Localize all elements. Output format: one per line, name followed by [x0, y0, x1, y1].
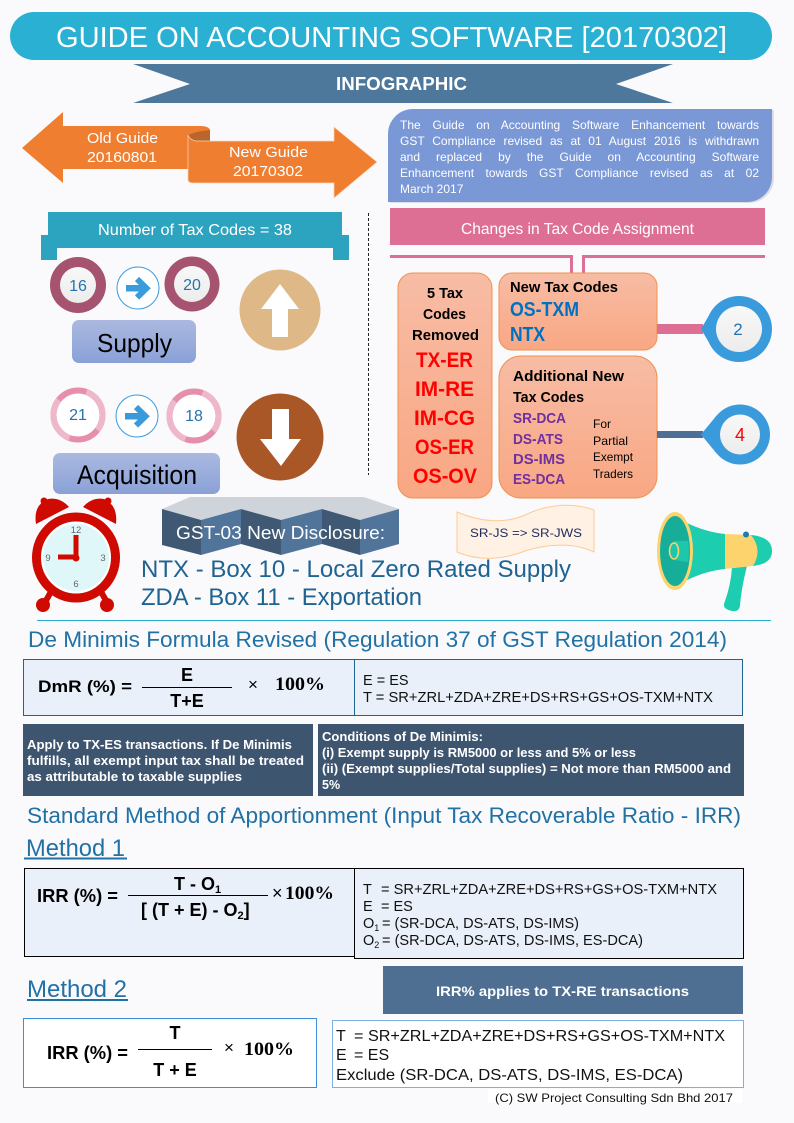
panel: additional new tax codes: Partial: [593, 434, 628, 448]
panel: removed codes: Codes: [423, 306, 466, 323]
method 2 formula: ×: [224, 1038, 234, 1057]
method 1 formula: ×: [272, 883, 283, 903]
heading: method 2: Method 2: [27, 976, 127, 1003]
icon: alarm clock: 3: [100, 553, 106, 564]
changes heading: [390, 208, 765, 245]
GST-03 disclosure heading: [162, 497, 399, 555]
method 2 formula: [24, 1018, 316, 1088]
GST-03 disclosure heading: GST-03 New Disclosure:: [176, 523, 385, 543]
method 1 definitions: = ES: [381, 899, 413, 915]
infographic ribbon: [133, 64, 673, 103]
panel: removed codes: TX-ER: [416, 349, 473, 372]
note: IRR applies to TX-RE: [383, 966, 743, 1014]
de minimis formula: [24, 660, 354, 716]
icon: acquisition arrow: [116, 395, 158, 437]
supply ring: 16: 16: [69, 278, 87, 295]
method 1 definitions: 1: [374, 923, 379, 933]
method 1 formula: T - O: [174, 874, 215, 894]
supply ring: 20: [164, 256, 220, 312]
note: IRR applies to TX-RE: IRR% applies to TX-RE transactions: [436, 983, 689, 999]
method 2 definitions: = SR+ZRL+ZDA+ZRE+DS+RS+GS+OS-TXM+NTX: [354, 1028, 725, 1045]
panel: new tax codes: NTX: [510, 324, 546, 346]
number of tax codes banner: Number of Tax Codes = 38: [98, 222, 292, 239]
panel: additional new tax codes: DS-ATS: [513, 431, 563, 448]
method 2 definitions: Exclude (SR-DCA, DS-ATS, DS-IMS, ES-DCA): [336, 1067, 683, 1084]
acquisition label: Acquisition: [77, 460, 197, 490]
panel: removed codes: 5 Tax: [427, 285, 464, 302]
intro text panel: GST Compliance revised as at 01 August 2016 is withdrawn: [400, 134, 759, 148]
arrow: new guide: [188, 127, 377, 198]
method 1 formula: [24, 868, 354, 956]
icon: supply arrow: [117, 267, 159, 309]
panel: additional new tax codes: DS-IMS: [513, 451, 565, 468]
note: TX-ES transactions: as attributable to taxable supplies: [27, 770, 242, 784]
heading: standard method: Standard Method of Apportionment (Input Tax Recoverable Ratio - IRR): [27, 803, 741, 828]
note: conditions of de minimis: (ii) (Exempt supplies/Total supplies) = Not more than RM5000 and: [322, 762, 731, 776]
intro text panel: March 2017: [400, 182, 464, 196]
panel: additional new tax codes: SR-DCA: [513, 410, 566, 427]
method 1 definitions: E: [363, 899, 373, 915]
intro text panel: and replaced by the Guide on Accounting Software: [400, 150, 759, 164]
icon: alarm clock: 6: [73, 579, 79, 590]
wave note: SR-JS to SR-JWS: [457, 505, 594, 558]
icon: down arrow: [236, 394, 324, 480]
note: TX-ES transactions: [23, 724, 313, 796]
arrow: new guide: New Guide: [229, 144, 308, 161]
acquisition ring: 21: 21: [69, 407, 87, 424]
note: conditions of de minimis: [318, 724, 744, 796]
callout: count 2: [657, 296, 772, 362]
method 1 definitions: = SR+ZRL+ZDA+ZRE+DS+RS+GS+OS-TXM+NTX: [381, 882, 717, 898]
panel: additional new tax codes: Tax Codes: [513, 389, 584, 406]
callout: count 4: 4: [735, 425, 745, 445]
method 1 formula: ]: [244, 900, 250, 920]
de minimis formula: E: [181, 665, 193, 685]
heading connector: [390, 256, 765, 273]
de minimis formula: 100%: [275, 674, 325, 695]
icon: alarm clock: 12: [71, 525, 81, 536]
note: TX-ES transactions: Apply to TX-ES transactions. If De Minimis: [27, 738, 292, 752]
method 2 definitions: = ES: [354, 1047, 389, 1064]
title banner: [10, 12, 772, 60]
note: conditions of de minimis: (i) Exempt supply is RM5000 or less and 5% or less: [322, 746, 636, 760]
panel: removed codes: IM-RE: [415, 378, 474, 401]
de minimis formula: T+E: [170, 691, 204, 711]
disclosure text: NTX - Box 10 - Local Zero Rated Supply: [141, 556, 571, 583]
method 1 formula: 2: [238, 910, 244, 922]
intro text panel: Enhancement towards GST Compliance revised as at 02: [400, 166, 759, 180]
de minimis formula: DmR (%) =: [38, 677, 132, 696]
method 1 formula: [ (T + E) - O: [141, 900, 238, 920]
de minimis definitions: T = SR+ZRL+ZDA+ZRE+DS+RS+GS+OS-TXM+NTX: [363, 690, 713, 706]
acquisition ring: 21: [47, 384, 109, 446]
method 2 formula: 100%: [244, 1039, 294, 1060]
arrow: old guide: Old Guide: [87, 130, 158, 147]
number of tax codes banner: [41, 212, 349, 260]
method 2 definitions: T: [336, 1028, 346, 1045]
method 1 definitions: O: [363, 916, 374, 932]
note: conditions of de minimis: 5%: [322, 778, 340, 792]
panel: additional new tax codes: [499, 356, 657, 498]
arrow: new guide: 20170302: [233, 163, 303, 180]
panel: additional new tax codes: For: [593, 417, 611, 431]
arrow: old guide: 20160801: [87, 149, 157, 166]
panel: removed codes: IM-CG: [414, 407, 475, 430]
icon: up arrow: [240, 270, 320, 350]
disclosure text: [141, 556, 571, 611]
title banner: GUIDE ON ACCOUNTING SOFTWARE [20170302]: [56, 22, 727, 54]
de minimis definitions: [354, 660, 742, 716]
intro text panel: [388, 109, 774, 203]
method 2 definitions: E: [336, 1047, 347, 1064]
note: conditions of de minimis: Conditions of De Minimis:: [322, 730, 483, 744]
panel: new tax codes: [499, 273, 657, 350]
method 1 definitions: = (SR-DCA, DS-ATS, DS-IMS): [382, 916, 579, 932]
method 2 formula: T + E: [153, 1060, 197, 1080]
de minimis formula: ×: [248, 675, 258, 694]
wave note: SR-JS to SR-JWS: SR-JS => SR-JWS: [470, 526, 582, 540]
acquisition ring: 18: 18: [185, 408, 203, 425]
disclosure text: ZDA - Box 11 - Exportation: [141, 584, 422, 611]
de minimis definitions: E = ES: [363, 673, 409, 689]
note: TX-ES transactions: fulfills, all exempt input tax shall be treated: [27, 754, 304, 768]
panel: removed codes: Removed: [412, 327, 479, 344]
icon: alarm clock: [36, 498, 116, 612]
acquisition ring: 18: [163, 385, 225, 447]
panel: new tax codes: OS-TXM: [510, 299, 579, 321]
panel: additional new tax codes: Exempt: [593, 450, 634, 464]
callout: count 4: [657, 404, 770, 464]
supply ring: 20: 20: [183, 277, 201, 294]
method 1 formula: 100%: [285, 883, 334, 904]
panel: removed codes: OS-OV: [413, 465, 477, 488]
method 1 definitions: T: [363, 882, 372, 898]
method 2 definitions: [332, 1020, 744, 1088]
panel: removed codes: [398, 273, 492, 498]
method 1 formula: IRR (%) =: [37, 886, 118, 906]
supply label: [72, 320, 196, 363]
panel: removed codes: OS-ER: [415, 436, 474, 459]
callout: count 2: 2: [733, 320, 743, 339]
method 1 definitions: 2: [374, 940, 379, 950]
panel: additional new tax codes: Traders: [593, 467, 633, 481]
icon: megaphone: [657, 512, 772, 611]
changes heading: Changes in Tax Code Assignment: [461, 221, 695, 238]
panel: additional new tax codes: Additional New: [513, 368, 624, 385]
panel: additional new tax codes: ES-DCA: [513, 471, 565, 488]
method 1 definitions: = (SR-DCA, DS-ATS, DS-IMS, ES-DCA): [382, 933, 643, 949]
method 1 definitions: O: [363, 933, 374, 949]
intro text panel: The Guide on Accounting Software Enhancement towards: [400, 118, 759, 132]
method 1 definitions: [354, 868, 744, 958]
panel: new tax codes: New Tax Codes: [510, 279, 618, 296]
acquisition label: [53, 453, 220, 494]
arrow: old guide: [22, 112, 210, 183]
supply ring: 16: [50, 257, 106, 313]
infographic ribbon: INFOGRAPHIC: [336, 74, 467, 94]
heading: method 1: Method 1: [26, 835, 125, 862]
icon: alarm clock: 9: [45, 553, 51, 564]
method 1 formula: 1: [215, 884, 221, 896]
method 2 formula: T: [170, 1023, 180, 1043]
method 2 formula: IRR (%) =: [47, 1043, 128, 1063]
supply label: Supply: [97, 328, 172, 358]
heading: de minimis: De Minimis Formula Revised (Regulation 37 of GST Regulation 2014): [28, 627, 727, 652]
copyright note: (C) SW Project Consulting Sdn Bhd 2017: [495, 1091, 733, 1105]
